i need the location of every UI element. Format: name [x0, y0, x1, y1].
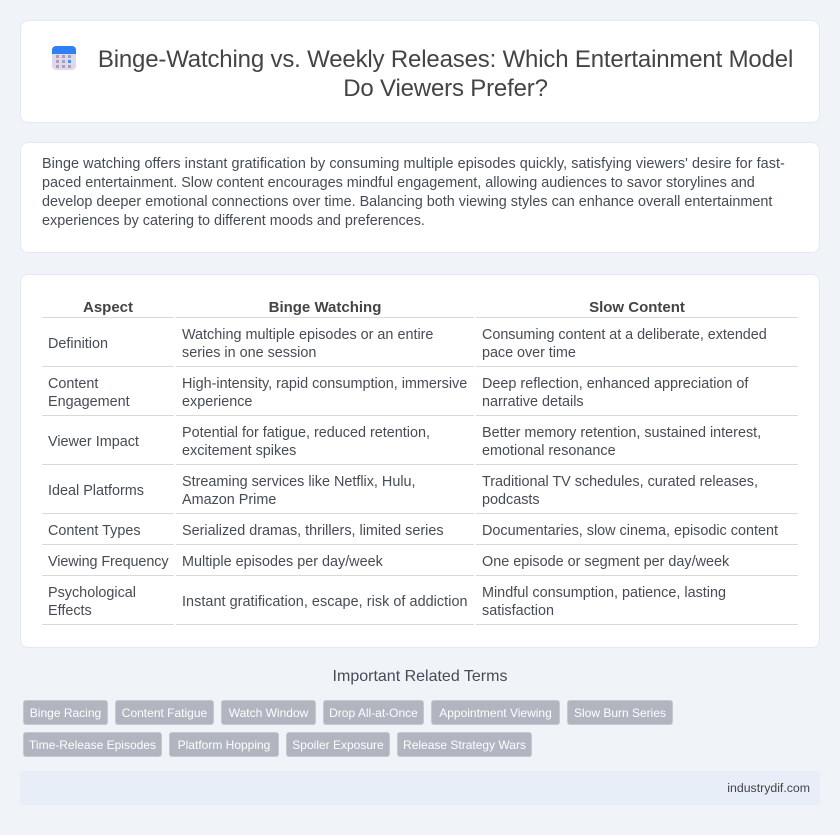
footer source: industrydif.com	[727, 781, 810, 795]
tag: Appointment Viewing	[439, 706, 552, 720]
footer bar	[20, 771, 820, 805]
intro text: develop deeper emotional connections over time. Balancing both viewing styles can enhance overall entertainment	[42, 194, 772, 210]
tag	[286, 732, 390, 757]
tag	[323, 700, 424, 725]
impact: binge: excitement spikes	[182, 443, 296, 459]
table header: binge watching: Binge Watching	[269, 299, 381, 316]
tag: Binge Racing	[30, 706, 101, 720]
effects: slow: Mindful consumption, patience, lasting	[482, 585, 726, 601]
tag	[397, 732, 532, 757]
row: content engagement: Content	[48, 376, 98, 392]
tag: Platform Hopping	[178, 738, 270, 752]
definition: binge: Watching multiple episodes or an entire	[182, 327, 433, 343]
tag	[431, 700, 560, 725]
row: viewer impact: Viewer Impact	[48, 434, 139, 450]
engagement: slow: narrative details	[482, 394, 584, 410]
platforms: slow: podcasts	[482, 492, 540, 508]
impact: slow: emotional resonance	[482, 443, 616, 459]
intro text: paced entertainment. Slow content encourages mindful engagement, allowing audiences to savor storylines and	[42, 175, 755, 191]
platforms: slow	[482, 474, 758, 508]
tag: Spoiler Exposure	[292, 738, 384, 752]
title	[98, 46, 793, 102]
engagement: binge: High-intensity, rapid consumption, immersive	[182, 376, 467, 392]
intro text	[42, 156, 785, 229]
impact: slow: Better memory retention, sustained interest,	[482, 425, 761, 441]
tag	[23, 700, 108, 725]
intro text: Binge watching offers instant gratification by consuming multiple episodes quickly, satisfying viewers' desire for fast-	[42, 156, 785, 172]
table header: aspect: Aspect	[83, 299, 133, 316]
panel: comparison table	[20, 274, 820, 648]
impact: binge: Potential for fatigue, reduced retention,	[182, 425, 430, 441]
tag: Drop All-at-Once	[329, 706, 418, 720]
tag	[567, 700, 673, 725]
row: psychological effects: Psychological	[48, 585, 136, 601]
row: content types: Content Types	[48, 523, 141, 539]
platforms: binge: Streaming services like Netflix, Hulu,	[182, 474, 416, 490]
row: content engagement	[48, 376, 130, 410]
types: slow: Documentaries, slow cinema, episodic content	[482, 523, 778, 539]
tag	[115, 700, 214, 725]
definition: slow: Consuming content at a deliberate, extended	[482, 327, 767, 343]
engagement: slow: Deep reflection, enhanced appreciation of	[482, 376, 748, 392]
icon: calendar	[52, 46, 76, 70]
tag: Content Fatigue	[122, 706, 207, 720]
effects: binge: Instant gratification, escape, risk of addiction	[182, 594, 468, 610]
definition: slow	[482, 327, 767, 361]
tag group	[23, 700, 673, 757]
effects: slow	[482, 585, 726, 619]
tag: Watch Window	[229, 706, 308, 720]
engagement: slow	[482, 376, 748, 410]
platforms: binge: Amazon Prime	[182, 492, 276, 508]
row: content engagement: Engagement	[48, 394, 130, 410]
title: Do Viewers Prefer?	[343, 75, 548, 102]
panel: intro paragraph	[20, 142, 820, 253]
tag: Time-Release Episodes	[29, 738, 156, 752]
row: ideal platforms: Ideal Platforms	[48, 483, 144, 499]
frequency: binge: Multiple episodes per day/week	[182, 554, 383, 570]
row: definition: Definition	[48, 336, 108, 352]
platforms: slow: Traditional TV schedules, curated releases,	[482, 474, 758, 490]
engagement: binge: experience	[182, 394, 252, 410]
tag	[221, 700, 316, 725]
row: psychological effects: Effects	[48, 603, 92, 619]
tag: Slow Burn Series	[574, 706, 666, 720]
table header: slow content: Slow Content	[589, 299, 685, 316]
types: binge: Serialized dramas, thrillers, limited series	[182, 523, 444, 539]
platforms: binge	[182, 474, 416, 508]
tag	[23, 732, 162, 757]
definition: slow: pace over time	[482, 345, 576, 361]
row: viewing frequency: Viewing Frequency	[48, 554, 168, 570]
impact: binge	[182, 425, 430, 459]
header card	[20, 20, 820, 123]
intro text: experiences by catering to different moods and preferences.	[42, 213, 425, 229]
frequency: slow: One episode or segment per day/week	[482, 554, 729, 570]
tag: Release Strategy Wars	[403, 738, 526, 752]
impact: slow	[482, 425, 761, 459]
engagement: binge	[182, 376, 467, 410]
effects: slow: satisfaction	[482, 603, 554, 619]
tag	[169, 732, 279, 757]
row: psychological effects	[48, 585, 136, 619]
definition: binge	[182, 327, 433, 361]
heading: important related terms: Important Related Terms	[333, 668, 507, 685]
title: Binge-Watching vs. Weekly Releases: Which Entertainment Model	[98, 46, 793, 73]
definition: binge: series in one session	[182, 345, 316, 361]
